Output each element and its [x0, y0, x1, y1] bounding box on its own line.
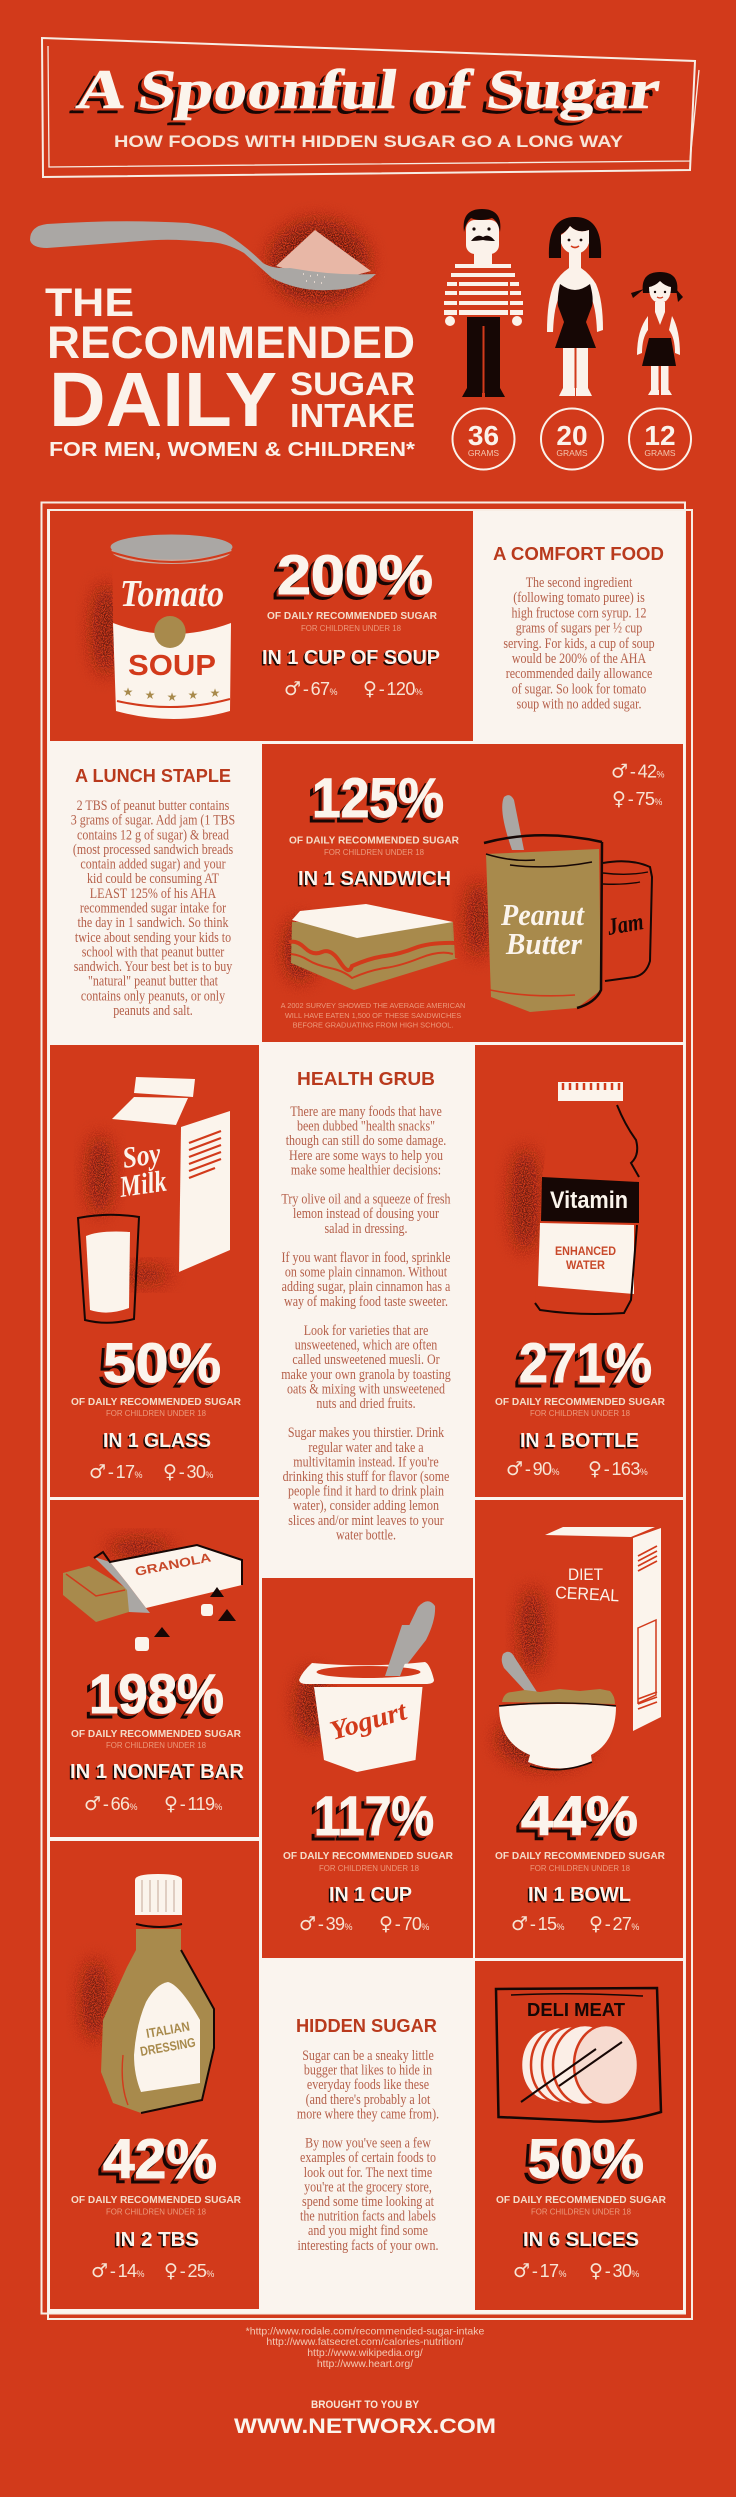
icon: soup can: Tomato [120, 573, 224, 615]
stat: 50%: 50% [98, 1336, 216, 1399]
body text: interesting facts of your own. [298, 2237, 438, 2253]
subtitle: HOW FOODS WITH HIDDEN SUGAR GO A LONG WAY [114, 133, 623, 151]
badge: 36 grams: 36 [468, 420, 499, 451]
panel: a comfort food [493, 544, 664, 712]
body text: spend some time looking at [302, 2193, 434, 2209]
icon: man [444, 209, 523, 397]
body text: sandwich. Your best bet is to buy [74, 958, 232, 974]
gender figures: ♂ - 67% [284, 678, 337, 700]
heading: HIDDEN SUGAR [296, 2016, 437, 2036]
body text: twice about sending your kids to [75, 929, 231, 945]
gender figures: ♂ - 42% [611, 760, 664, 782]
stat: 198%: 198% [84, 1667, 219, 1730]
body text: everyday foods like these [307, 2076, 429, 2093]
icon: soup can [92, 534, 232, 719]
gender figures [284, 678, 423, 700]
label: for children: FOR CHILDREN UNDER 18 [530, 1864, 631, 1873]
icon: italian dressing bottle: ITALIAN [145, 2019, 191, 2041]
gender figures: ♀ - 30% [589, 2260, 639, 2282]
label: in 1 bowl: IN 1 BOWL [528, 1884, 631, 1906]
label: of daily recommended sugar: OF DAILY RECOMMENDED SUGAR [495, 1396, 665, 1408]
body text: Sugar makes you thirstier. Drink [288, 1424, 444, 1441]
heading: recommended daily sugar intake: INTAKE [290, 397, 415, 434]
stat: 125%: 125% [310, 768, 442, 832]
icon: soup can: ★ [210, 686, 220, 700]
icon: jam jar [603, 861, 652, 981]
body text: water bottle. [336, 1526, 396, 1543]
body text: make your own granola by toasting [281, 1366, 451, 1382]
badge: 20 grams [541, 408, 603, 470]
body text: Here are some ways to help you [289, 1147, 443, 1163]
label: for children: FOR CHILDREN UNDER 18 [530, 1409, 631, 1418]
icon: soup can: ★ [145, 688, 155, 702]
label: in 1 bottle: IN 1 BOTTLE [520, 1430, 639, 1452]
body text: 2 TBS of peanut butter contains [77, 797, 229, 813]
body text: (most processed sandwich breads [73, 841, 233, 858]
icon: woman [547, 217, 603, 396]
credit: WWW.NETWORX.COM [234, 2415, 496, 2438]
label: in 1 nonfat bar: IN 1 NONFAT BAR [68, 1762, 243, 1784]
survey note: BEFORE GRADUATING FROM HIGH SCHOOL. [293, 1020, 453, 1030]
gender figures: ♀ - 163% [588, 1458, 648, 1480]
badge: 12 grams [629, 408, 691, 470]
panel: tomato soup stat [50, 511, 473, 741]
gender figures [511, 1913, 639, 1935]
icon: granola bar [63, 1539, 242, 1651]
stat: 50%: 50% [100, 1334, 218, 1396]
body text: (and there's probably a lot [306, 2091, 431, 2108]
panel: vitamin water stat [475, 1045, 683, 1497]
gender figures: ♀ - 30% [163, 1461, 213, 1483]
panel: hidden sugar [296, 2016, 439, 2253]
body text: contain added sugar) and your [80, 855, 226, 873]
label: of daily recommended sugar: OF DAILY RECOMMENDED SUGAR [289, 834, 459, 846]
sources: http://www.fatsecret.com/calories-nutrition/ [266, 2336, 464, 2348]
stat: 50%: 50% [528, 2127, 644, 2190]
icon: jam jar: Jam [605, 909, 645, 941]
icon: soup can: ★ [123, 685, 133, 699]
body text: and you might find some [308, 2222, 428, 2239]
body text: unsweetened, which are often [295, 1336, 437, 1353]
stat: 117%: 117% [312, 1786, 432, 1850]
icon: peanut butter jar [466, 795, 602, 1012]
survey note: A 2002 SURVEY SHOWED THE AVERAGE AMERICAN [281, 1001, 465, 1010]
stat: 125%: 125% [307, 771, 439, 834]
label: of daily recommended sugar: OF DAILY RECOMMENDED SUGAR [496, 2194, 666, 2206]
sources: http://www.heart.org/ [317, 2358, 413, 2370]
panel: diet cereal stat [475, 1500, 683, 1958]
gender figures [91, 2260, 214, 2282]
heading: recommended daily sugar intake: THE [45, 281, 134, 325]
heading: recommended daily sugar intake: FOR MEN, WOMEN & CHILDREN* [49, 438, 415, 461]
body text: adding sugar, plain cinnamon has a [282, 1278, 450, 1295]
stat: 44%: 44% [521, 1784, 638, 1847]
icon: italian dressing bottle [82, 1874, 214, 2113]
body text: would be 200% of the AHA [512, 650, 646, 666]
body text: of sugar. So look for tomato [512, 680, 646, 697]
label: in 1 glass: IN 1 GLASS [102, 1432, 210, 1454]
credit: BROUGHT TO YOU BY [311, 2399, 420, 2411]
gender figures [513, 2260, 639, 2282]
label: in 1 bowl: IN 1 BOWL [526, 1886, 630, 1908]
body text: grams of sugars per ½ cup [516, 619, 642, 636]
icon: italian dressing bottle: DRESSING [139, 2034, 197, 2059]
body text: bugger that likes to hide in [304, 2061, 432, 2078]
gender figures: ♂ - 66% [84, 1793, 137, 1815]
icon: child [631, 272, 683, 395]
credit [234, 2399, 496, 2438]
icon: granola bar: GRANOLA [134, 1551, 212, 1579]
icon: cereal box and bowl: CEREAL [555, 1583, 620, 1605]
icon: vitamin water bottle [511, 1082, 639, 1314]
gender figures: ♂ - 39% [299, 1913, 352, 1935]
label: in 1 nonfat bar: IN 1 NONFAT BAR [70, 1761, 245, 1783]
panel: granola stat [50, 1500, 259, 1837]
stat: 271%: 271% [514, 1336, 647, 1399]
icon: soup can: SOUP [128, 650, 216, 682]
title: A Spoonful of Sugar [70, 62, 661, 123]
stat: 42%: 42% [98, 2132, 212, 2195]
heading: recommended daily sugar intake: DAILY [49, 357, 277, 443]
icon: yogurt cup with spoon: Yogurt [326, 1695, 411, 1746]
body text: way of making food taste sweeter. [284, 1293, 448, 1309]
body text: Sugar can be a sneaky little [302, 2047, 434, 2063]
survey note [281, 1001, 465, 1030]
label: of daily recommended sugar: OF DAILY RECOMMENDED SUGAR [495, 1850, 665, 1862]
stat: 200%: 200% [272, 548, 428, 611]
sources [246, 2326, 484, 2370]
gender figures: ♀ - 25% [164, 2260, 214, 2282]
body text: soup with no added sugar. [517, 695, 641, 712]
sources: *http://www.rodale.com/recommended-sugar-intake [246, 2326, 484, 2338]
stat: 42%: 42% [100, 2130, 214, 2192]
gender figures: ♂ - 90% [506, 1458, 559, 1480]
body text: the day in 1 sandwich. So think [78, 914, 229, 930]
label: in 1 cup: IN 1 CUP [329, 1884, 412, 1906]
body text: kid could be consuming AT [87, 870, 220, 887]
label: for children: FOR CHILDREN UNDER 18 [324, 848, 425, 857]
icon: peanut butter jar: Peanut [500, 897, 585, 932]
body text: you're at the grocery store, [304, 2178, 432, 2195]
heading: HEALTH GRUB [297, 1069, 435, 1089]
label: in 6 slices: IN 6 SLICES [523, 2229, 639, 2251]
stat: 117%: 117% [314, 1784, 434, 1847]
gender figures: ♀ - 70% [379, 1913, 429, 1935]
body text: 3 grams of sugar. Add jam (1 TBS [71, 811, 235, 829]
body text: LEAST 125% of his AHA [90, 885, 216, 901]
body text: high fructose corn syrup. 12 [512, 604, 647, 621]
body text: school with that peanut butter [82, 943, 225, 960]
body text: though can still do some damage. [286, 1132, 446, 1149]
gender figures [299, 1913, 429, 1935]
body text: on some plain cinnamon. Without [285, 1263, 447, 1280]
badge: 20 grams: GRAMS [556, 448, 588, 458]
stat: 271%: 271% [519, 1331, 652, 1394]
label: in 1 cup: IN 1 CUP [328, 1886, 410, 1908]
body text: more where they came from). [297, 2105, 439, 2123]
stat: 44%: 44% [516, 1789, 633, 1852]
badge: 12 grams: GRAMS [644, 448, 676, 458]
heading: recommended daily sugar intake [45, 281, 415, 461]
label: of daily recommended sugar: OF DAILY RECOMMENDED SUGAR [267, 610, 437, 622]
label: for children: FOR CHILDREN UNDER 18 [106, 2208, 207, 2216]
stat: 198%: 198% [86, 1664, 222, 1728]
survey note: WILL HAVE EATEN 1,500 OF THESE SANDWICHES [285, 1011, 461, 1020]
title: A Spoonful of Sugar [73, 59, 664, 121]
stat: 50%: 50% [526, 2130, 642, 2192]
label: in 2 tbs: IN 2 TBS [114, 2230, 198, 2252]
heading: recommended daily sugar intake: SUGAR [290, 366, 415, 402]
badge: 36 grams: GRAMS [468, 448, 499, 458]
stat: 117%: 117% [309, 1789, 429, 1852]
label: in 1 cup of soup: IN 1 CUP OF SOUP [260, 648, 438, 670]
body text: serving. For kids, a cup of soup [503, 635, 655, 651]
gender figures: ♂ - 14% [91, 2260, 144, 2282]
illustration: spoon with sugar [30, 220, 376, 304]
stat: 42%: 42% [103, 2127, 217, 2190]
body text: The second ingredient [526, 574, 632, 590]
body text: recommended daily allowance [506, 665, 652, 682]
body text: contains 12 g of sugar) & bread [77, 826, 229, 844]
icon: yogurt cup with spoon [296, 1601, 435, 1772]
gender figures: ♂ - 15% [511, 1913, 564, 1935]
label: in 1 glass: IN 1 GLASS [103, 1430, 211, 1452]
icon: soy milk carton and glass [78, 1077, 230, 1323]
body text: multivitamin instead. If you're [293, 1453, 439, 1470]
stat: 271%: 271% [516, 1334, 650, 1396]
label: of daily recommended sugar: OF DAILY RECOMMENDED SUGAR [71, 2194, 241, 2206]
label: in 1 sandwich: IN 1 SANDWICH [298, 868, 451, 890]
label: of daily recommended sugar: OF DAILY RECOMMENDED SUGAR [71, 1728, 241, 1740]
label: for children: FOR CHILDREN UNDER 18 [106, 1409, 207, 1418]
panel: soy milk stat [50, 1045, 259, 1497]
label: for children: FOR CHILDREN UNDER 18 [301, 624, 402, 633]
badge: 36 grams [452, 408, 514, 470]
stat: 200%: 200% [277, 543, 433, 606]
badge: 12 grams: 12 [644, 420, 676, 451]
icon: vitamin water bottle: WATER [566, 1258, 605, 1272]
gender figures: ♀ - 119% [164, 1793, 222, 1815]
label: for children: FOR CHILDREN UNDER 18 [531, 2208, 632, 2216]
label: in 1 sandwich: IN 1 SANDWICH [296, 870, 450, 892]
body text: examples of certain foods to [300, 2149, 436, 2166]
stat: 50%: 50% [523, 2132, 639, 2195]
body text: been dubbed "health snacks" [297, 1117, 435, 1134]
icon: deli meat package: DELI MEAT [527, 2000, 625, 2020]
body text: slices and/or mint leaves to your [288, 1512, 444, 1528]
stat: 200%: 200% [274, 546, 430, 608]
body text: called unsweetened muesli. Or [292, 1351, 440, 1368]
icon: cereal box and bowl [497, 1527, 661, 1770]
body text: If you want flavor in food, sprinkle [282, 1249, 450, 1265]
icon: soy milk carton and glass: Milk [117, 1165, 169, 1204]
body text: There are many foods that have [290, 1103, 442, 1119]
icon: deli meat package [496, 1988, 661, 2122]
panel: deli meat stat [475, 1961, 683, 2310]
body text: make some healthier decisions: [291, 1161, 441, 1178]
stat: 44%: 44% [518, 1786, 636, 1850]
body text: contains only peanuts, or only [81, 987, 225, 1004]
body text: water), consider adding lemon [293, 1497, 439, 1515]
body text: recommended sugar intake for [80, 899, 227, 916]
label: in 2 tbs: IN 2 TBS [115, 2229, 199, 2251]
body text: oats & mixing with unsweetened [287, 1380, 445, 1397]
badge: 20 grams: 20 [556, 420, 588, 451]
body text: salad in dressing. [325, 1220, 407, 1236]
body text: (following tomato puree) is [513, 589, 645, 607]
heading: A COMFORT FOOD [493, 544, 664, 564]
icon: sandwich [284, 904, 458, 990]
body text: Try olive oil and a squeeze of fresh [281, 1190, 451, 1207]
body text: lemon instead of dousing your [293, 1205, 439, 1222]
panel: italian dressing stat [50, 1841, 259, 2309]
body text: By now you've seen a few [305, 2134, 431, 2151]
icon: cereal box and bowl: DIET [568, 1565, 603, 1584]
label: of daily recommended sugar: OF DAILY RECOMMENDED SUGAR [71, 1396, 241, 1408]
icon: soy milk carton and glass: Soy [120, 1137, 163, 1175]
title: A Spoonful of Sugar [67, 64, 658, 126]
gender figures: ♂ - 17% [89, 1461, 142, 1483]
gender figures [89, 1461, 213, 1483]
label: for children: FOR CHILDREN UNDER 18 [319, 1864, 420, 1873]
stat: 198%: 198% [89, 1662, 224, 1725]
label: in 1 bottle: IN 1 BOTTLE [518, 1432, 638, 1454]
panel: yogurt stat [262, 1578, 473, 1958]
icon: peanut butter jar: Butter [505, 926, 583, 961]
heading: A LUNCH STAPLE [75, 766, 231, 786]
body text: look out for. The next time [304, 2164, 432, 2180]
panel: a lunch staple [71, 766, 235, 1018]
gender figures [611, 760, 664, 810]
icon: soup can: ★ [167, 690, 177, 704]
body text: Look for varieties that are [304, 1322, 428, 1338]
gender figures [506, 1458, 648, 1480]
gender figures: ♂ - 17% [513, 2260, 566, 2282]
stat: 50%: 50% [103, 1331, 221, 1394]
label: in 1 cup of soup: IN 1 CUP OF SOUP [262, 647, 440, 669]
title block [42, 38, 699, 177]
body text: nuts and dried fruits. [316, 1395, 416, 1411]
body text: peanuts and salt. [113, 1002, 193, 1018]
gender figures: ♀ - 75% [612, 788, 662, 810]
gender figures [84, 1793, 222, 1815]
body text: the nutrition facts and labels [300, 2207, 436, 2224]
sources: http://www.wikipedia.org/ [307, 2347, 423, 2359]
gender figures: ♀ - 27% [589, 1913, 639, 1935]
label: for children: FOR CHILDREN UNDER 18 [106, 1741, 207, 1750]
body text: drinking this stuff for flavor (some [283, 1468, 449, 1485]
panel: sandwich stat [262, 744, 683, 1042]
icon: vitamin water bottle: ENHANCED [555, 1244, 616, 1258]
heading: recommended daily sugar intake: RECOMMENDED [47, 317, 415, 368]
stat: 125%: 125% [312, 766, 444, 829]
body text: regular water and take a [308, 1439, 424, 1455]
label: in 6 slices: IN 6 SLICES [522, 2230, 638, 2252]
icon: vitamin water bottle: Vitamin [550, 1187, 628, 1214]
icon: soup can: ★ [188, 688, 198, 702]
panel: health grub [281, 1069, 451, 1543]
label: of daily recommended sugar: OF DAILY RECOMMENDED SUGAR [283, 1850, 453, 1862]
body text: "natural" peanut butter that [88, 972, 218, 989]
gender figures: ♀ - 120% [363, 678, 423, 700]
body text: people find it hard to drink plain [288, 1482, 444, 1499]
